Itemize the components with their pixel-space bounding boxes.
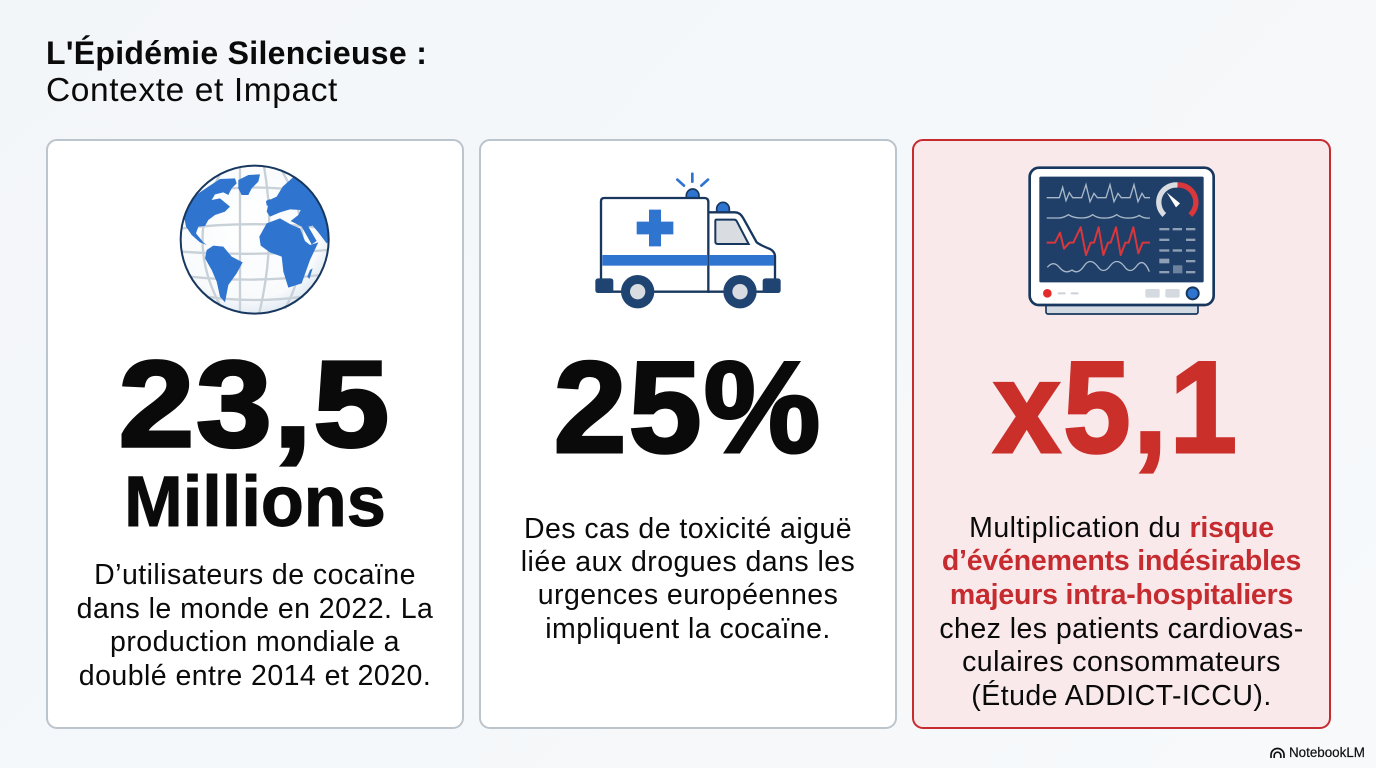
description: D’utilisateurs de cocaïne <box>94 559 416 591</box>
big label: Millions: Millions <box>124 463 386 542</box>
description <box>521 513 855 645</box>
icon: logo arcs <box>1270 748 1285 758</box>
description: production mondiale a <box>110 626 400 658</box>
logo text: NotebookLM <box>1289 745 1365 760</box>
description: chez les patients cardiovas- <box>939 613 1304 645</box>
description: d’événements indésirables <box>942 545 1301 577</box>
description: impliquent la cocaïne. <box>545 613 831 645</box>
big number: x5,1: x5,1 <box>993 334 1240 480</box>
description: doublé entre 2014 et 2020. <box>79 660 431 692</box>
title line: subtitle: Contexte et Impact <box>46 72 338 109</box>
panel: users worldwide <box>46 139 464 729</box>
description: liée aux drogues dans les <box>521 546 855 578</box>
title <box>46 35 427 109</box>
icon: globe <box>180 164 330 315</box>
description <box>77 559 433 692</box>
panel: cardiovascular risk <box>912 139 1331 729</box>
description: majeurs intra-hospitaliers <box>950 579 1293 611</box>
description: Multiplication du risque <box>969 512 1274 544</box>
description: dans le monde en 2022. La <box>77 593 433 625</box>
description: culaires consommateurs <box>962 646 1281 678</box>
big number: 23,5: 23,5 <box>119 336 391 472</box>
description: urgences européennes <box>538 579 838 611</box>
big number: 25%: 25% <box>554 334 822 480</box>
icon: ambulance <box>595 172 781 308</box>
description <box>939 512 1304 712</box>
description: (Étude ADDICT-ICCU). <box>971 680 1272 712</box>
panel: emergency cases <box>479 139 897 729</box>
logo: NotebookLM <box>1270 745 1365 760</box>
icon: patient monitor <box>1028 166 1215 315</box>
title line: bold: L'Épidémie Silencieuse : <box>46 35 427 71</box>
description: Des cas de toxicité aiguë <box>524 513 852 545</box>
